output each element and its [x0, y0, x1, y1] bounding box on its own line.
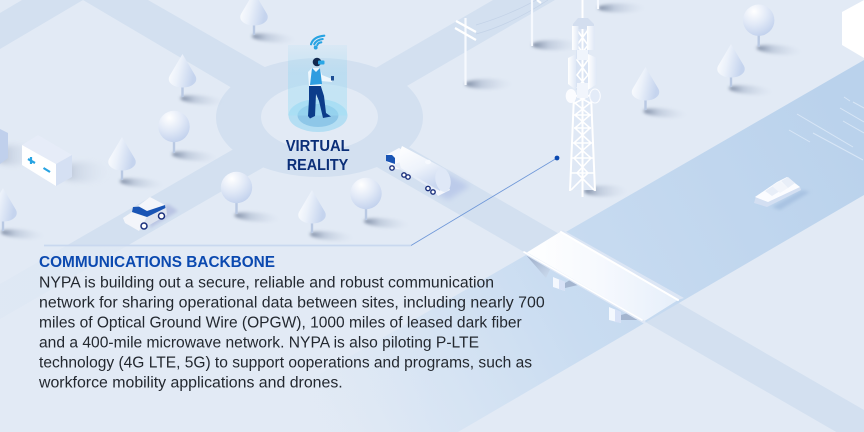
tree — [240, 0, 296, 44]
tree — [169, 54, 225, 106]
deck — [526, 232, 678, 322]
label: virtual reality: VIRTUAL — [286, 138, 350, 155]
headset — [318, 60, 324, 64]
tank — [399, 146, 447, 191]
tree — [632, 67, 688, 119]
upper antenna panels — [572, 26, 578, 50]
pillar shadows — [565, 280, 578, 288]
icon: wifi — [311, 36, 324, 48]
utility poles — [455, 0, 646, 89]
car roof — [138, 197, 165, 211]
round tree — [350, 178, 410, 230]
car windshield — [132, 205, 166, 217]
lower antenna panels — [568, 54, 576, 90]
lattice body — [571, 95, 594, 190]
car body — [123, 212, 147, 231]
tower shadow — [584, 186, 628, 196]
body text: workforce mobility applications and drones. — [38, 374, 343, 391]
VR user figure — [288, 45, 348, 132]
leader line — [44, 156, 559, 246]
legs — [308, 85, 331, 118]
hologram column — [288, 45, 347, 116]
chassis — [393, 160, 448, 193]
boat — [754, 177, 810, 210]
label: virtual reality — [286, 138, 350, 174]
round tree — [221, 172, 281, 224]
car — [123, 197, 178, 231]
far railing band — [558, 230, 684, 300]
controller — [331, 76, 334, 80]
text backdrop — [0, 246, 430, 432]
telecom tower — [566, 0, 628, 197]
wires — [476, 0, 548, 34]
body text: network for sharing operational data between sites, including nearly 700 — [39, 294, 545, 311]
tree — [298, 190, 354, 242]
dish antennas — [566, 89, 576, 103]
body text: miles of Optical Ground Wire (OPGW), 1000 miles of leased dark fiber — [39, 314, 522, 331]
building corner top right — [842, 0, 864, 58]
bridge — [524, 230, 684, 323]
label: virtual reality: REALITY — [287, 157, 349, 174]
tree — [717, 44, 773, 96]
pole 2 — [531, 0, 533, 46]
head — [313, 58, 321, 66]
pole shadows — [465, 79, 513, 89]
cab — [386, 148, 406, 170]
tower legs — [570, 95, 595, 191]
plaza inner ring — [261, 84, 378, 150]
tree — [108, 137, 164, 189]
base discs — [288, 99, 348, 132]
body text: NYPA is building out a secure, reliable and robust communication — [39, 274, 494, 291]
pole 3 — [597, 0, 599, 9]
body text: and a 400-mile microwave network. NYPA is also piloting P-LTE — [39, 334, 479, 351]
pillars — [553, 277, 565, 291]
tree — [0, 188, 45, 240]
water ripples — [789, 97, 864, 160]
centre block — [577, 83, 588, 98]
underside shadow — [526, 255, 552, 278]
pole 1 — [464, 18, 467, 85]
battery box left edge — [0, 129, 38, 165]
shirt and arm — [308, 68, 332, 86]
railings — [525, 253, 644, 322]
vest — [310, 68, 322, 85]
icon: battery — [22, 135, 110, 186]
round tree — [158, 111, 218, 163]
round tree — [743, 4, 803, 56]
leader dot — [555, 156, 559, 160]
boat cabins — [765, 186, 780, 196]
river — [219, 60, 864, 432]
trees — [0, 0, 803, 242]
body text: technology (4G LTE, 5G) to support ooperations and programs, such as — [39, 354, 532, 371]
heading: COMMUNICATIONS BACKBONE — [39, 254, 275, 271]
upper cap — [573, 18, 594, 29]
tanker truck — [386, 146, 470, 200]
body text — [38, 274, 545, 391]
